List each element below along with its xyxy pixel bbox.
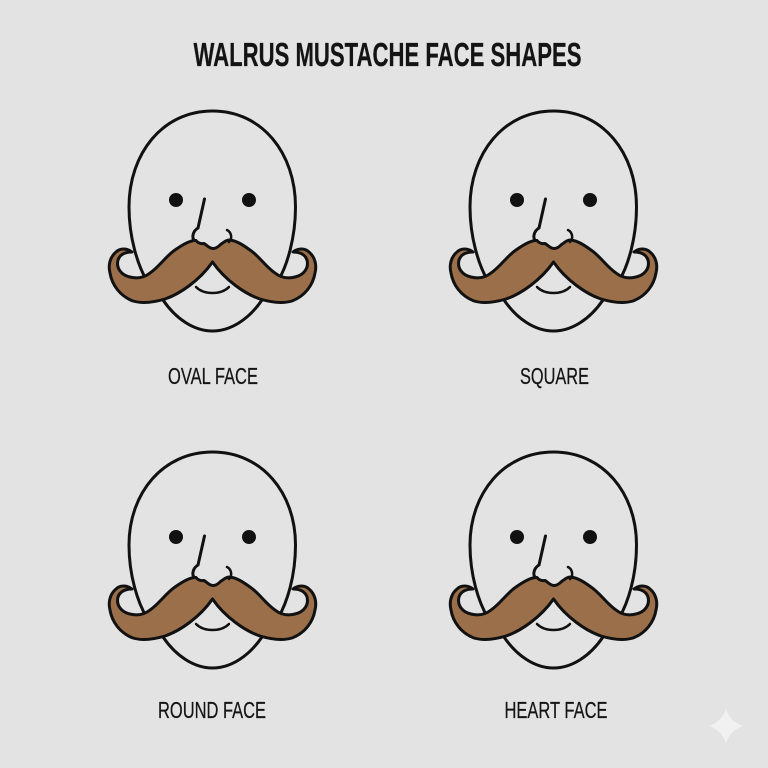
head outline (470, 452, 636, 668)
smile (196, 287, 229, 293)
nose (534, 199, 546, 241)
nostril (568, 230, 572, 242)
icon: sparkle (708, 708, 744, 744)
smile (196, 624, 229, 630)
eyes (510, 530, 597, 544)
eyes (169, 530, 256, 544)
label: SQUARE (520, 363, 589, 389)
head outline (470, 111, 636, 331)
nose (193, 536, 204, 578)
panel: square face (450, 111, 657, 389)
head outline (129, 452, 296, 668)
nostril (227, 567, 231, 579)
mustache (450, 240, 657, 302)
mustache (450, 577, 657, 639)
nostril (227, 230, 231, 242)
nose (193, 199, 204, 241)
mustache (109, 240, 316, 302)
panel: heart face (450, 452, 657, 723)
mustache (109, 577, 316, 639)
panel: oval face (109, 111, 316, 389)
panel: round face (109, 452, 316, 723)
nose (534, 536, 546, 578)
label: OVAL FACE (168, 363, 258, 389)
head outline (129, 111, 296, 331)
title: WALRUS MUSTACHE FACE SHAPES (194, 36, 582, 73)
smile (537, 624, 570, 630)
label: ROUND FACE (158, 697, 266, 723)
eyes (169, 193, 256, 207)
eyes (510, 193, 597, 207)
nostril (568, 567, 572, 579)
smile (537, 287, 570, 293)
label: HEART FACE (504, 697, 608, 723)
